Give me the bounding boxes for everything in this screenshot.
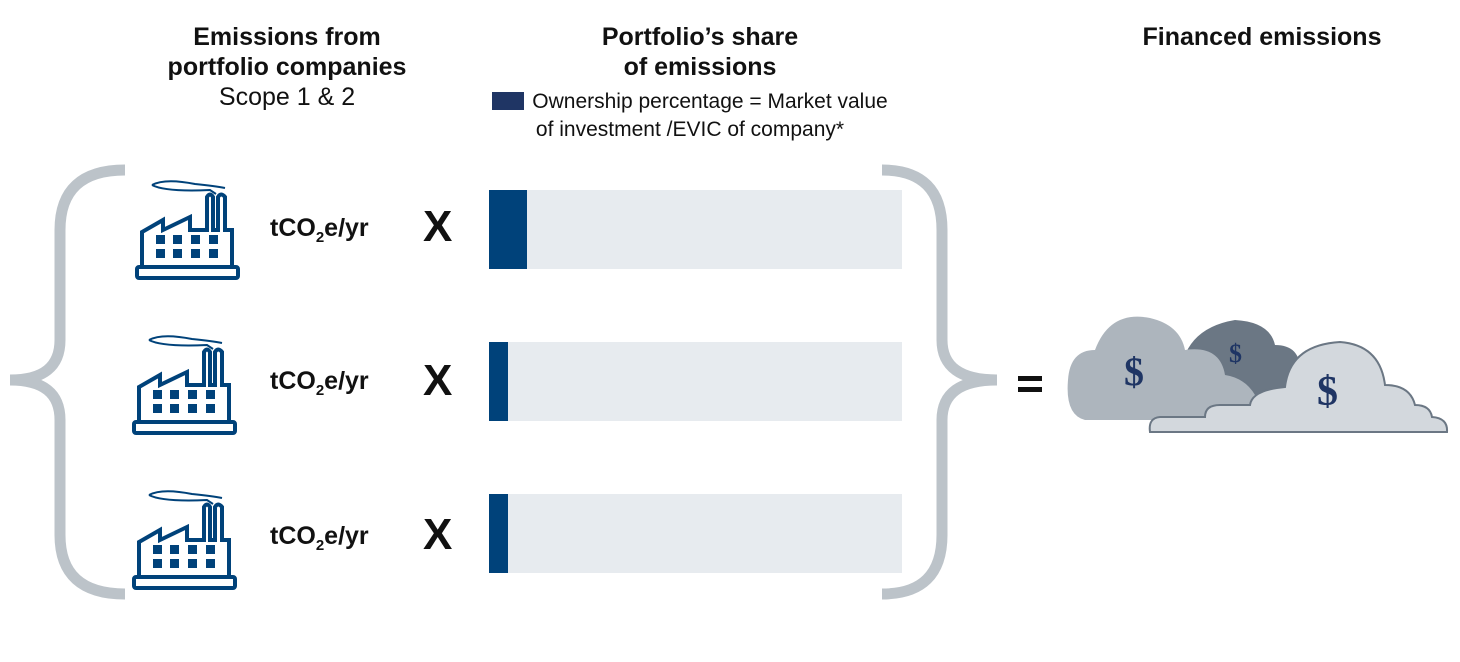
clouds: $: [1229, 339, 1242, 368]
text: X: [423, 510, 452, 559]
clouds: $: [1124, 349, 1144, 394]
text: X: [423, 356, 452, 405]
heading: portfolio's share: of emissions: [624, 53, 776, 81]
heading: financed emissions: Financed emissions: [1143, 23, 1381, 51]
heading: portfolio's share: Portfolio’s share: [602, 23, 798, 51]
text: tCO2e/yr: [270, 522, 369, 554]
right brace: [882, 170, 997, 594]
heading: emissions from portfolio companies: portfolio companies: [168, 53, 406, 81]
heading: emissions from portfolio companies: Scope 1 & 2: [219, 83, 355, 111]
row labels: tCO2e/yr: [270, 214, 369, 246]
text: tCO2e/yr: [270, 367, 369, 399]
heading: emissions from portfolio companies: Emissions from: [193, 23, 381, 51]
legend: of investment /EVIC of company*: [536, 118, 844, 141]
heading: emissions from portfolio companies: [168, 23, 406, 111]
multiply signs: X: [423, 202, 452, 251]
left brace: [10, 170, 125, 594]
legend: [492, 90, 888, 141]
equals sign: [1018, 376, 1042, 392]
clouds: $: [1317, 369, 1338, 415]
legend: Ownership percentage = Market value: [532, 90, 888, 113]
bars: [489, 190, 902, 269]
clouds: [1068, 317, 1447, 432]
heading: portfolio's share: [602, 23, 798, 81]
factories: [137, 181, 238, 278]
